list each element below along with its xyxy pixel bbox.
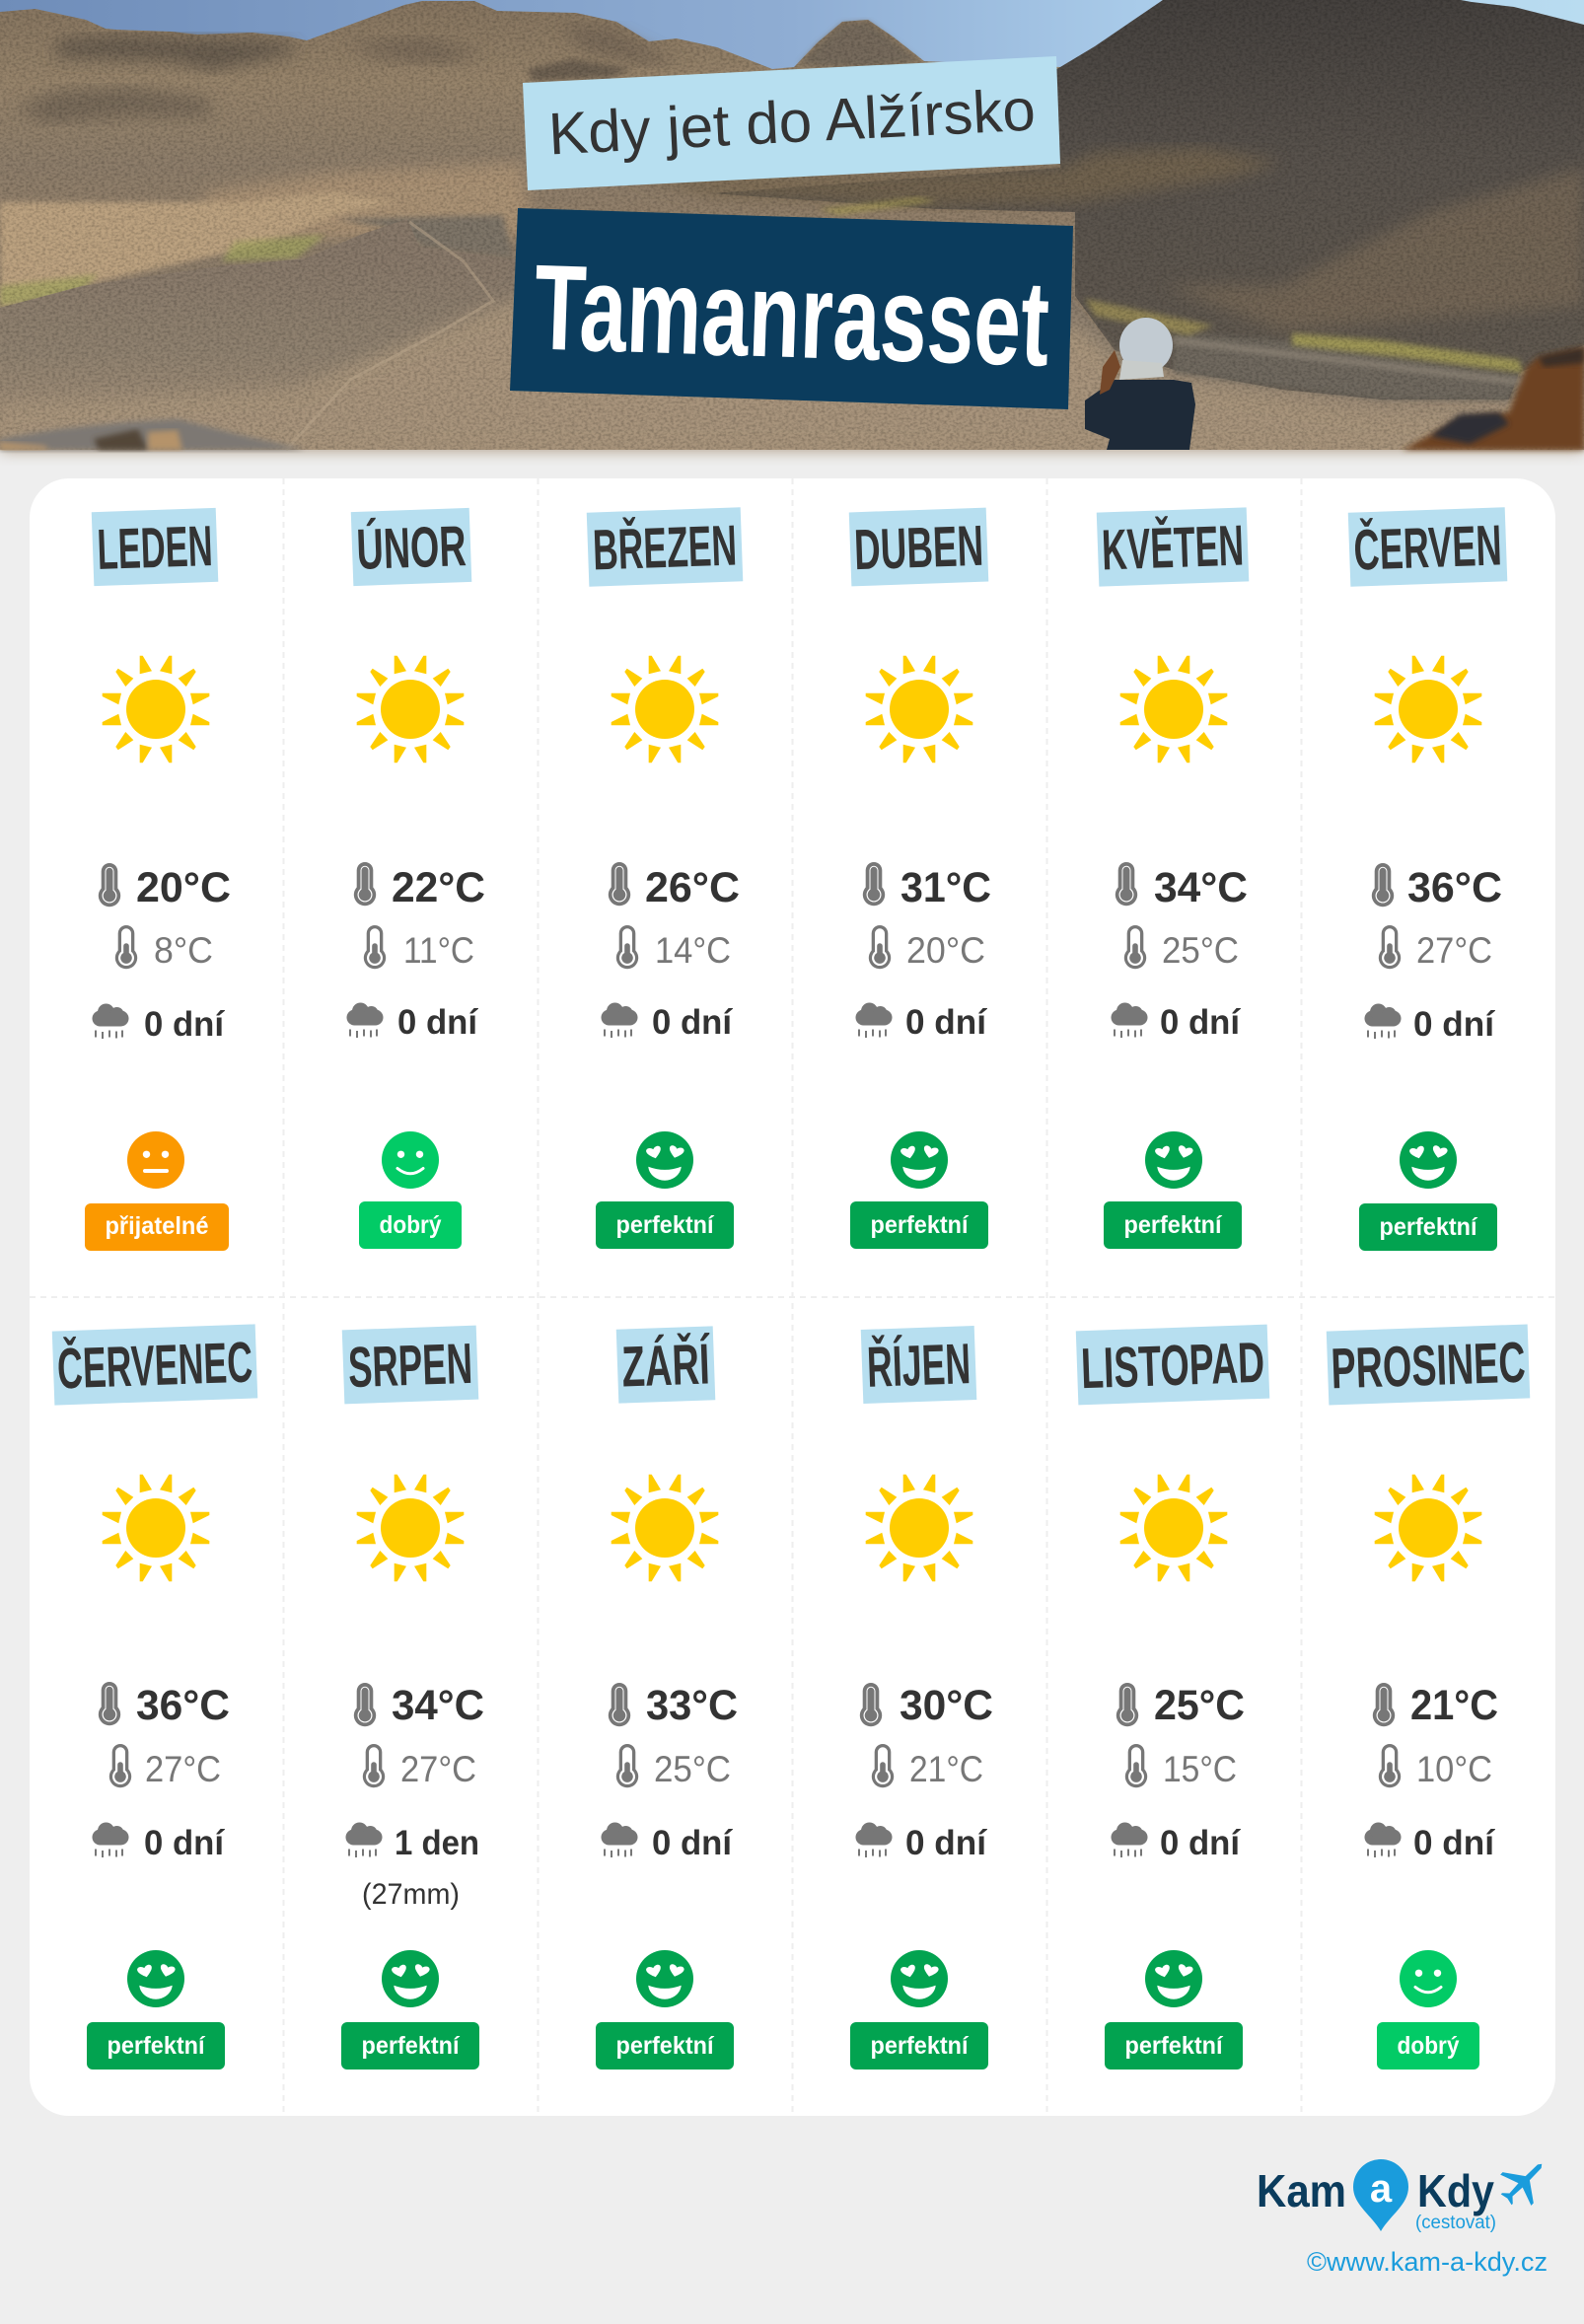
rating face — [636, 1131, 693, 1189]
rain days: 0 dní — [144, 1005, 225, 1044]
high temperature: 26°C — [645, 864, 740, 911]
low temperature — [616, 1744, 731, 1789]
rating badge: perfektní — [870, 1211, 969, 1239]
high temperature: 33°C — [646, 1682, 738, 1729]
rating badge: perfektní — [615, 1211, 714, 1239]
icon: sun — [357, 656, 464, 763]
month label: SRPEN — [347, 1332, 473, 1400]
rating badge: přijatelné — [105, 1212, 209, 1240]
low temperature: 11°C — [403, 930, 474, 971]
rating badge: perfektní — [1379, 1213, 1477, 1241]
rain days: 0 dní — [1413, 1824, 1495, 1862]
low temperature: 10°C — [1416, 1749, 1492, 1789]
low temperature — [364, 925, 474, 971]
panel: srpen — [341, 1326, 484, 2070]
rating badge — [341, 2022, 479, 2070]
title banner — [510, 208, 1073, 409]
month label: ŘÍJEN — [866, 1332, 972, 1400]
low temperature — [872, 1744, 983, 1789]
low temperature: 27°C — [400, 1749, 476, 1789]
rating badge: perfektní — [615, 2032, 714, 2060]
icon: sun — [103, 1475, 209, 1581]
month label — [861, 1326, 976, 1404]
rating badge — [1105, 2022, 1243, 2070]
rain days — [1365, 1823, 1495, 1862]
low temperature: 27°C — [1416, 930, 1492, 971]
rating badge — [1359, 1203, 1497, 1251]
icon: sun — [612, 1475, 718, 1581]
high temperature — [1373, 1682, 1498, 1729]
rating badge — [596, 1201, 734, 1249]
rain days — [856, 1002, 987, 1042]
low temperature — [1379, 1744, 1492, 1789]
rating face — [1145, 1950, 1202, 2007]
title banner: Tamanrasset — [533, 240, 1051, 393]
icon: sun — [1375, 656, 1481, 763]
panel: únor — [347, 508, 485, 1249]
rain days — [347, 1002, 478, 1042]
rain amount: (27mm) — [362, 1878, 460, 1911]
rain days — [93, 1823, 225, 1862]
rating face — [127, 1131, 184, 1189]
low temperature — [109, 1744, 221, 1789]
panel: duben — [849, 508, 991, 1249]
panel: listopad — [1076, 1325, 1269, 2070]
rating badge: perfektní — [1124, 2032, 1223, 2060]
month label — [587, 507, 743, 587]
rating face — [127, 1950, 184, 2007]
low temperature — [1379, 925, 1492, 971]
rating badge: dobrý — [379, 1211, 442, 1239]
rating badge — [359, 1201, 462, 1249]
month label — [52, 1324, 257, 1406]
rain days: 0 dní — [144, 1824, 225, 1862]
icon: sun — [1375, 1475, 1481, 1581]
panel: months card — [30, 478, 1555, 2116]
month label: LISTOPAD — [1080, 1331, 1265, 1401]
month label — [1348, 507, 1507, 587]
logo: Kam a Kdy: a — [1370, 2167, 1393, 2211]
rain days: 0 dní — [397, 1003, 478, 1042]
low temperature: 25°C — [654, 1749, 731, 1789]
rain days — [602, 1002, 733, 1042]
rating badge — [1377, 2022, 1479, 2070]
rating face — [891, 1950, 948, 2007]
logo: Kam a Kdy: (cestovat) — [1415, 2213, 1496, 2233]
high temperature: 31°C — [900, 864, 991, 911]
logo: Kam a Kdy — [1257, 2148, 1557, 2233]
low temperature — [869, 925, 985, 971]
high temperature — [354, 862, 485, 911]
high temperature — [860, 1682, 993, 1729]
high temperature — [1116, 862, 1248, 911]
icon: sun — [866, 1475, 972, 1581]
month label: KVĚTEN — [1101, 514, 1245, 582]
rain days: 0 dní — [1160, 1003, 1241, 1042]
month label: ČERVENEC — [56, 1331, 253, 1401]
icon: sun — [612, 656, 718, 763]
rating badge — [850, 1201, 988, 1249]
rating badge: perfektní — [870, 2032, 969, 2060]
low temperature: 25°C — [1162, 930, 1239, 971]
panel: červenec — [52, 1324, 257, 2070]
logo: Kam a Kdy: Kam — [1257, 2165, 1346, 2216]
high temperature: 36°C — [136, 1682, 230, 1729]
high temperature: 21°C — [1410, 1682, 1498, 1729]
rain days: 0 dní — [1413, 1005, 1495, 1044]
high temperature: 22°C — [392, 864, 485, 911]
month label: BŘEZEN — [592, 513, 738, 583]
icon: sun — [357, 1475, 464, 1581]
rating face — [382, 1131, 439, 1189]
website credit: ©www.kam-a-kdy.cz — [1307, 2247, 1548, 2277]
rating badge — [596, 2022, 734, 2070]
month label: LEDEN — [96, 514, 214, 582]
rating badge — [850, 2022, 988, 2070]
rain days: 0 dní — [652, 1003, 733, 1042]
month label: ÚNOR — [355, 514, 468, 582]
month label — [1097, 507, 1249, 587]
low temperature: 27°C — [145, 1749, 221, 1789]
panel: leden — [85, 508, 231, 1251]
icon: sun — [1120, 1475, 1227, 1581]
month label — [849, 508, 988, 586]
month label — [342, 1326, 478, 1404]
rating face — [382, 1950, 439, 2007]
panel: září — [596, 1326, 738, 2070]
low temperature: 15°C — [1163, 1749, 1237, 1789]
month label — [92, 508, 218, 586]
panel: říjen — [850, 1326, 993, 2070]
rain days: 0 dní — [905, 1003, 987, 1042]
rain days — [1111, 1823, 1241, 1862]
month label: DUBEN — [853, 514, 984, 582]
low temperature: 14°C — [655, 930, 731, 971]
rating badge — [87, 2022, 225, 2070]
icon: sun — [103, 656, 209, 763]
icon: sun — [866, 656, 972, 763]
rating badge: perfektní — [1124, 1211, 1222, 1239]
panel: prosinec — [1327, 1324, 1530, 2070]
high temperature: 30°C — [900, 1682, 993, 1729]
rain days: 0 dní — [1160, 1824, 1241, 1862]
high temperature: 36°C — [1407, 864, 1502, 911]
high temperature — [863, 862, 991, 911]
rain days — [93, 1004, 225, 1044]
subtitle banner: Kdy jet do Alžírsko — [547, 77, 1037, 167]
low temperature — [616, 925, 731, 971]
low temperature — [1124, 925, 1239, 971]
rating badge — [85, 1203, 229, 1251]
rating face — [1145, 1131, 1202, 1189]
low temperature: 8°C — [154, 930, 213, 971]
rain days — [345, 1823, 479, 1862]
month label — [616, 1326, 715, 1404]
rating badge — [1104, 1201, 1242, 1249]
high temperature — [609, 862, 740, 911]
subtitle banner — [523, 56, 1060, 190]
hero photo: desert landscape — [0, 0, 1584, 450]
icon: airplane — [1491, 2148, 1557, 2215]
rain days: 0 dní — [905, 1824, 987, 1862]
high temperature: 20°C — [136, 864, 231, 911]
month label: ZÁŘÍ — [620, 1332, 712, 1400]
rain days: 0 dní — [652, 1824, 733, 1862]
panel: červen — [1348, 507, 1507, 1251]
low temperature: 21°C — [909, 1749, 983, 1789]
high temperature — [609, 1682, 738, 1729]
low temperature: 20°C — [906, 930, 985, 971]
rating face — [1400, 1131, 1457, 1189]
low temperature — [1125, 1744, 1237, 1789]
rain days — [602, 1823, 733, 1862]
low temperature — [363, 1744, 476, 1789]
rating face — [891, 1131, 948, 1189]
panel: březen — [587, 507, 743, 1249]
panel: květen — [1097, 507, 1249, 1249]
rating badge: perfektní — [361, 2032, 460, 2060]
high temperature: 25°C — [1154, 1682, 1245, 1729]
high temperature: 34°C — [392, 1682, 484, 1729]
icon: map pin — [1353, 2159, 1408, 2231]
month label — [1076, 1325, 1269, 1405]
rain days: 1 den — [395, 1824, 479, 1862]
rating face — [1400, 1950, 1457, 2007]
rain days — [1111, 1002, 1241, 1042]
rain days — [1365, 1004, 1495, 1044]
rain days — [856, 1823, 987, 1862]
month label — [351, 508, 471, 586]
rating badge: dobrý — [1397, 2032, 1460, 2060]
high temperature: 34°C — [1154, 864, 1248, 911]
logo: Kam a Kdy: Kdy — [1417, 2165, 1494, 2216]
rating badge: perfektní — [107, 2032, 205, 2060]
low temperature — [115, 925, 213, 971]
icon: sun — [1120, 656, 1227, 763]
rating face — [636, 1950, 693, 2007]
high temperature — [1116, 1682, 1245, 1729]
